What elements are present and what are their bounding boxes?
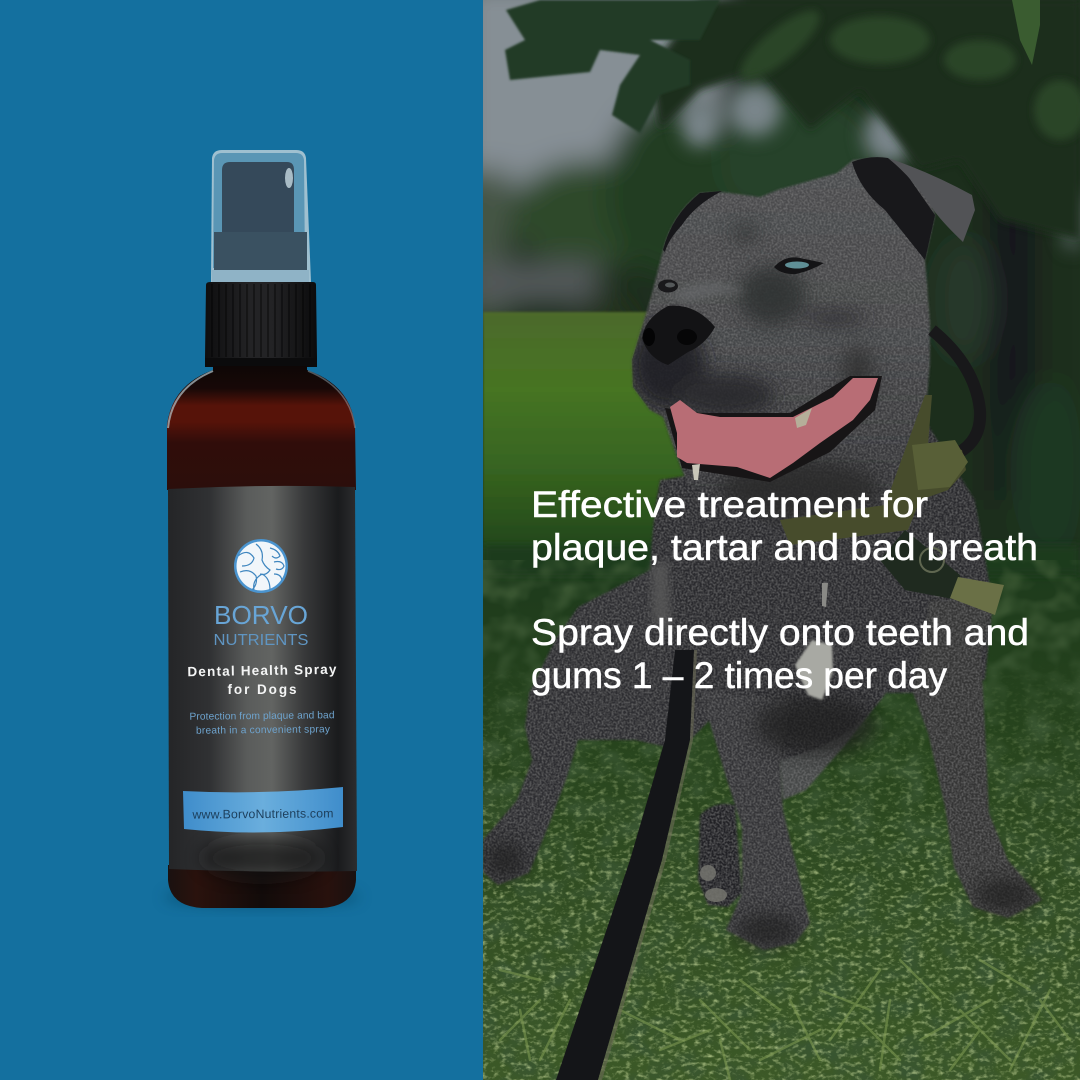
- dog haunch and rear left leg: [483, 570, 710, 885]
- lawn: [483, 311, 685, 554]
- website strip: www.BorvoNutrients.com: [191, 806, 334, 822]
- dog right eye: [774, 257, 824, 274]
- benefit text: plaque, tartar and bad breath: [531, 527, 1038, 568]
- product description: breath in a convenient spray: [196, 724, 331, 737]
- usage text: [531, 612, 1029, 696]
- collar padded section: [912, 440, 968, 490]
- product name: for Dogs: [228, 682, 296, 697]
- dog collar: [780, 395, 1004, 615]
- bottle clear cap: [211, 150, 311, 282]
- dog mouth and tongue: [665, 376, 882, 482]
- website strip: [183, 787, 343, 833]
- hanging leaf top right: [1012, 0, 1040, 65]
- logo: [234, 539, 288, 593]
- bottle label: [168, 486, 357, 878]
- brand subtitle: NUTRIENTS: [214, 632, 308, 649]
- product: spray bottle: [164, 150, 360, 908]
- bottle amber shoulder: [167, 366, 356, 490]
- dog belly fold: [779, 712, 870, 800]
- collar strap and webbing: [780, 395, 966, 545]
- photo: dog sitting on grass: [460, 0, 1080, 1080]
- leash: [556, 650, 694, 1080]
- dog collar strap loop: [932, 330, 980, 453]
- dog torso: [650, 420, 993, 760]
- usage text: gums 1 – 2 times per day: [531, 655, 947, 696]
- dog body group: [483, 420, 1042, 950]
- canopy leaf highlights: [731, 1, 1080, 140]
- dog muzzle bridge highlight: [668, 282, 748, 302]
- grass texture: [483, 684, 1080, 1080]
- dog nose: [642, 306, 715, 365]
- dog paw shading: [485, 695, 1035, 946]
- dog face shading: [630, 224, 880, 520]
- sky bokeh: [682, 84, 1080, 250]
- panel: blue product background: [0, 0, 483, 1080]
- collar end tab: [950, 577, 1004, 615]
- foreground grass blades: [500, 960, 1070, 1080]
- ground grass: [483, 560, 1080, 1080]
- usage text: Spray directly onto teeth and: [531, 612, 1029, 653]
- dog white chest patch: [795, 640, 833, 700]
- benefit text: [531, 484, 1038, 568]
- dog right ear: [852, 157, 935, 260]
- product name: Dental Health Spray: [187, 662, 337, 679]
- dog left eye: [658, 280, 678, 292]
- product description: Protection from plaque and bad: [189, 710, 335, 723]
- dog head: [630, 157, 975, 530]
- dog front left leg: [700, 690, 810, 950]
- dog: [483, 157, 1042, 1080]
- benefit text: Effective treatment for: [531, 484, 928, 525]
- top left leaves: [505, 0, 720, 133]
- collar buckle: [880, 530, 960, 600]
- text block: benefit and usage: [531, 484, 1038, 696]
- dog rear paw: [698, 804, 742, 907]
- dog rear toes: [700, 865, 727, 902]
- product description: [189, 710, 335, 737]
- brand name: BORVO: [214, 600, 308, 630]
- dog neck highlight: [651, 560, 672, 640]
- tree canopy: [505, 0, 1080, 240]
- product name: [187, 662, 337, 697]
- dog left ear: [663, 191, 722, 252]
- bottle base: [168, 865, 356, 908]
- bottle black sprayer collar: [205, 282, 317, 367]
- blurred background scenery: [483, 0, 1080, 542]
- canopy dark mass: [650, 0, 1080, 240]
- dog front right leg: [913, 600, 1042, 918]
